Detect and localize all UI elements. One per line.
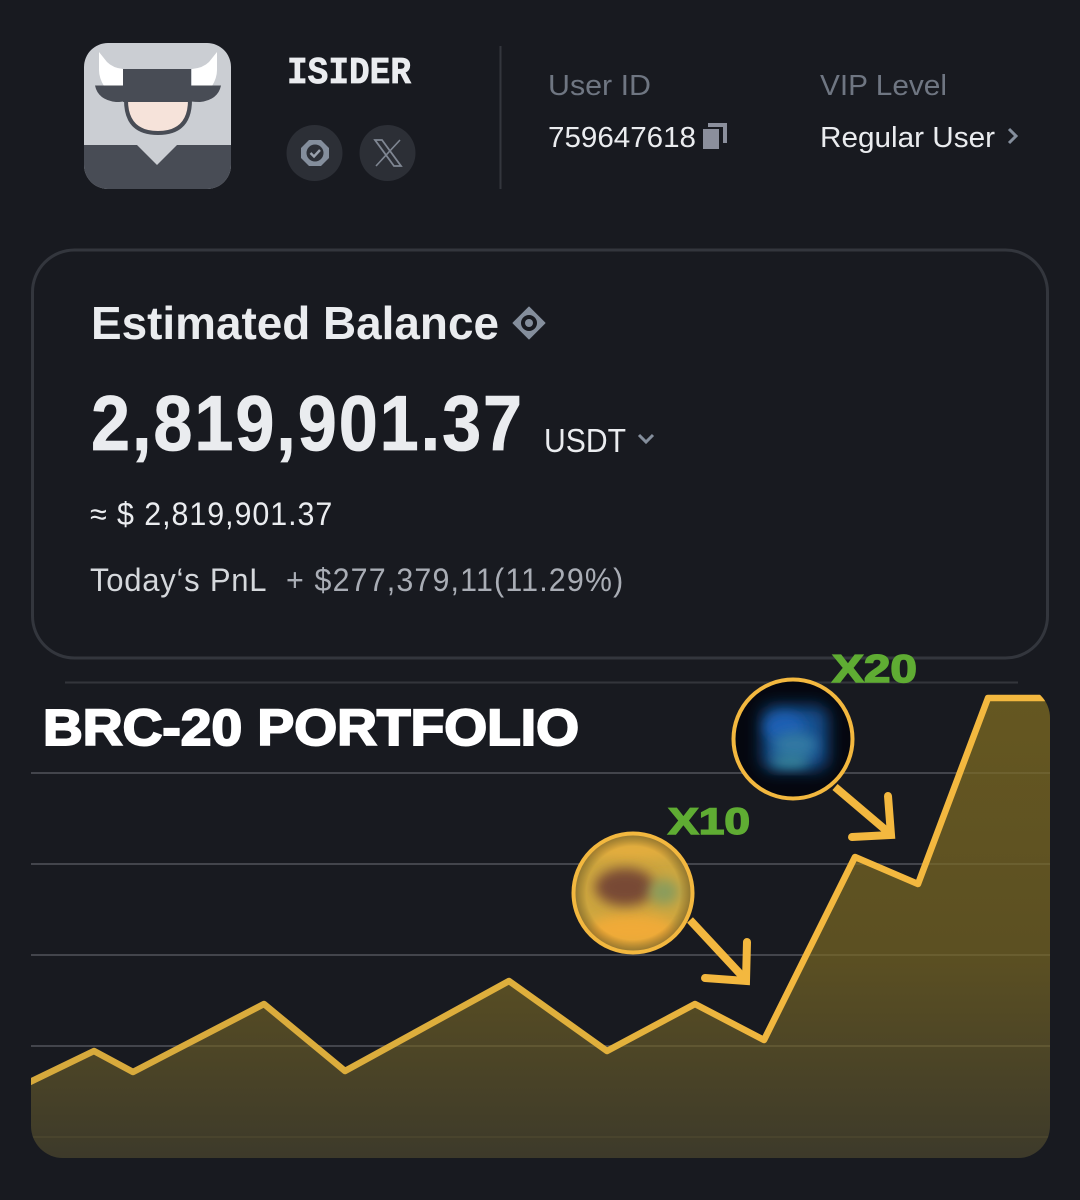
- user id block: 759647618: [548, 122, 696, 154]
- multiplier label x10: X10: [668, 801, 750, 842]
- chart title: BRC-20 PORTFOLIO: [43, 699, 579, 756]
- arrow: x20: [835, 787, 891, 837]
- vip level block: VIP Level: [820, 70, 947, 102]
- header divider: [500, 46, 502, 189]
- balance value: 2,819,901.37: [91, 380, 522, 467]
- pnl value: + $277,379,11(11.29%): [286, 562, 623, 598]
- icon: eye: [513, 307, 545, 339]
- panel: estimated balance: [32, 250, 1048, 658]
- usd equivalent: ≈ $ 2,819,901.37: [90, 496, 332, 532]
- icon: verified badge: [286, 125, 342, 181]
- currency: USDT: [544, 422, 626, 459]
- user id block: [548, 70, 727, 154]
- icon: X social badge: [360, 125, 416, 181]
- multiplier label x20: X20: [832, 648, 917, 691]
- token marker x10: [570, 801, 750, 981]
- token marker x20: [730, 648, 917, 837]
- vip level block: [820, 70, 1016, 154]
- vip level block: Regular User: [820, 122, 995, 154]
- token icon: blurred orange: [576, 836, 690, 950]
- chart: portfolio area: [28, 682, 1052, 1158]
- user id block: User ID: [548, 70, 651, 102]
- icon: chevron: [1009, 129, 1016, 143]
- icon: bull avatar: [84, 43, 231, 189]
- arrow: x10: [690, 920, 747, 981]
- pnl label: Today‘s PnL: [90, 562, 267, 598]
- username: ISIDER: [287, 52, 411, 95]
- icon: copy: [703, 123, 727, 149]
- icon: dropdown chevron: [639, 435, 653, 442]
- heading: Estimated Balance: [91, 297, 499, 349]
- token icon: blurred blue: [736, 682, 850, 796]
